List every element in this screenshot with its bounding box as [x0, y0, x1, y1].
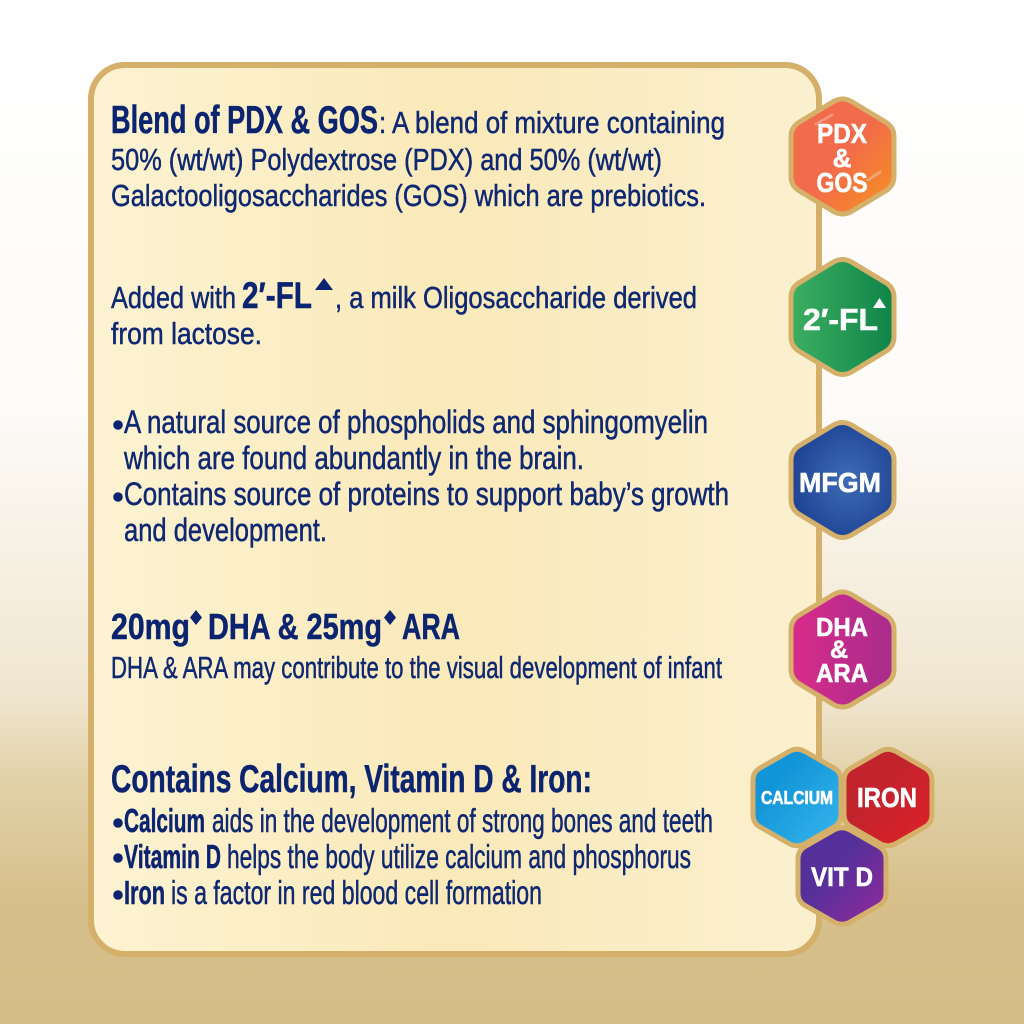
icon: DHA and ARA hexagon: DHA: [816, 612, 868, 642]
text block: calcium, vitamin D and iron: is a factor in red blood cell formation: [171, 874, 542, 911]
text block: calcium, vitamin D and iron: aids in the development of strong bones and teeth: [212, 802, 713, 839]
text block: blend of PDX and GOS: : A blend of mixture containing: [379, 105, 725, 140]
text block: calcium, vitamin D and iron: Iron: [124, 874, 165, 911]
icon: DHA and ARA hexagon: &: [830, 636, 848, 664]
icon: DHA and ARA hexagon: [791, 592, 894, 707]
text block: calcium, vitamin D and iron: Vitamin D: [124, 838, 221, 875]
text block: calcium, vitamin D and iron: Contains Calcium, Vitamin D & Iron:: [111, 758, 592, 801]
text block: calcium, vitamin D and iron: Calcium: [124, 802, 205, 839]
text block: DHA and ARA: DHA & ARA may contribute to the visual development of infant: [111, 650, 722, 685]
text block: calcium, vitamin D and iron: helps the body utilize calcium and phosphorus: [227, 838, 691, 875]
text block: MFGM bullets: Contains source of proteins to support baby’s growth: [124, 476, 729, 512]
icon: calcium hexagon: CALCIUM: [761, 788, 833, 808]
icon: calcium hexagon: [753, 749, 841, 846]
text block: DHA and ARA: 20mg: [111, 606, 190, 647]
text block: 2'-FL: Added with: [111, 280, 236, 315]
icon: PDX and GOS hexagon: PDX: [817, 118, 867, 149]
icon: PDX and GOS hexagon: GOS: [816, 167, 868, 198]
icon: PDX and GOS hexagon: &: [833, 143, 851, 173]
text block: MFGM bullets: [113, 404, 729, 548]
icon: iron hexagon: IRON: [857, 782, 917, 813]
panel: benefits card: [91, 65, 819, 954]
text block: 2'-FL: 2′-FL: [242, 275, 312, 316]
icon: vitamin D hexagon: VIT D: [811, 862, 873, 892]
text block: DHA and ARA: DHA & 25mg: [208, 606, 382, 647]
icon: DHA and ARA hexagon: ARA: [816, 658, 868, 688]
icon: MFGM hexagon: MFGM: [799, 467, 881, 498]
text block: blend of PDX and GOS: [111, 99, 725, 213]
icon: MFGM hexagon: [791, 422, 894, 538]
text block: 2'-FL: [111, 275, 697, 351]
text block: MFGM bullets: A natural source of phospholids and sphingomyelin: [124, 404, 708, 440]
icon: iron hexagon: [844, 749, 932, 846]
text block: blend of PDX and GOS: Galactooligosaccharides (GOS) which are prebiotics.: [111, 178, 706, 213]
text block: DHA and ARA: [111, 606, 722, 685]
icon: PDX and GOS hexagon: [791, 99, 894, 214]
text block: blend of PDX and GOS: Blend of PDX & GOS: [111, 99, 378, 142]
text block: calcium, vitamin D and iron: [111, 758, 713, 911]
icon: vitamin D hexagon: [798, 828, 886, 924]
text block: 2'-FL: , a milk Oligosaccharide derived: [335, 280, 697, 315]
text block: DHA and ARA: ARA: [402, 606, 460, 647]
icon: 2'-FL hexagon: 2′-FL: [803, 302, 878, 337]
text block: blend of PDX and GOS: 50% (wt/wt) Polydextrose (PDX) and 50% (wt/wt): [111, 142, 662, 177]
text block: 2'-FL: from lactose.: [111, 316, 262, 351]
icon: 2'-FL hexagon: [791, 260, 894, 374]
text block: MFGM bullets: and development.: [124, 512, 327, 548]
text block: MFGM bullets: which are found abundantly in the brain.: [123, 440, 584, 476]
